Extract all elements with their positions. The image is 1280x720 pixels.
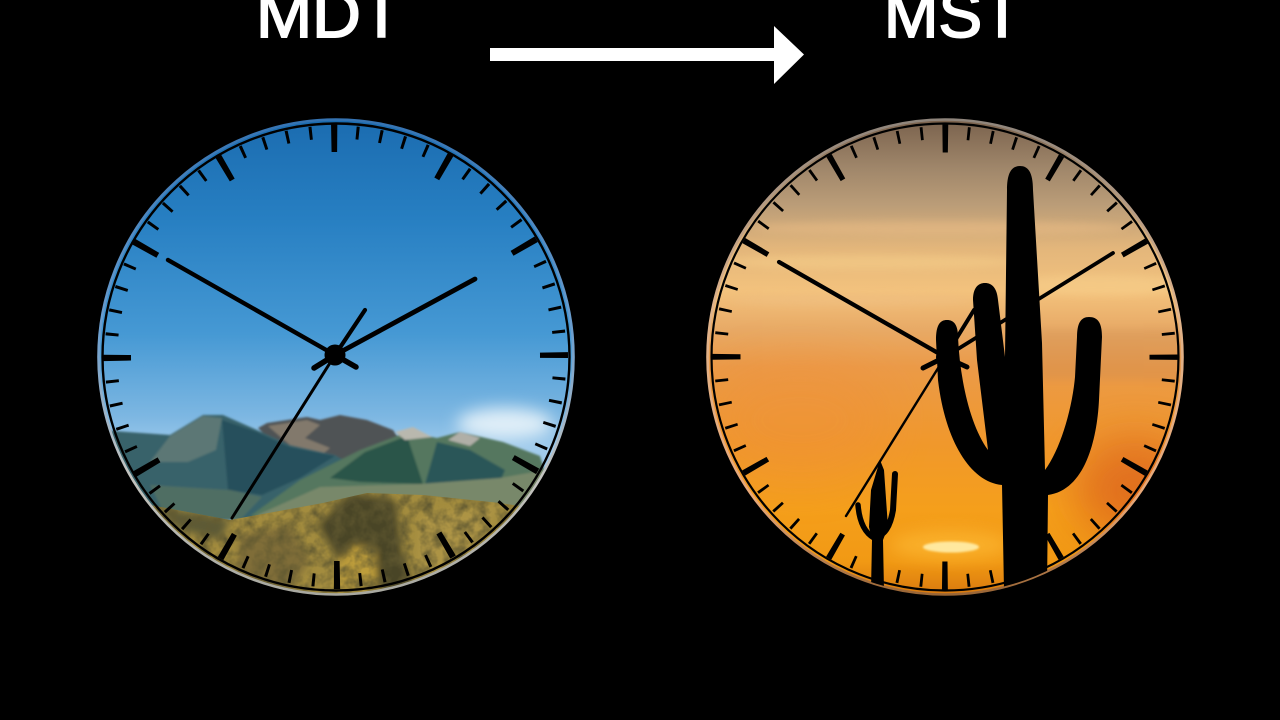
inner ring: [102, 124, 570, 590]
sunset scene: [700, 110, 1195, 600]
hour ticks: [726, 138, 1164, 576]
hour ticks: [115, 136, 556, 577]
center hub: [324, 344, 346, 366]
panel: MST clock with desert sunset: [700, 110, 1195, 600]
silhouette: large saguaro cactus: [936, 166, 1102, 590]
clock hands: [168, 260, 475, 518]
rim: [98, 120, 574, 594]
rim: [708, 120, 1182, 594]
minute ticks: [109, 130, 562, 583]
center hub: [936, 348, 954, 366]
arrow: MDT to MST: [490, 26, 804, 84]
panel: MDT clock with mountain landscape: [90, 110, 580, 610]
minute ticks: [720, 132, 1170, 582]
mountain daytime scene: [90, 110, 580, 610]
clock hands: [779, 253, 1113, 516]
silhouette: small saguaro cactus: [858, 460, 895, 590]
sun glow: [890, 531, 1010, 559]
inner ring: [712, 124, 1178, 590]
